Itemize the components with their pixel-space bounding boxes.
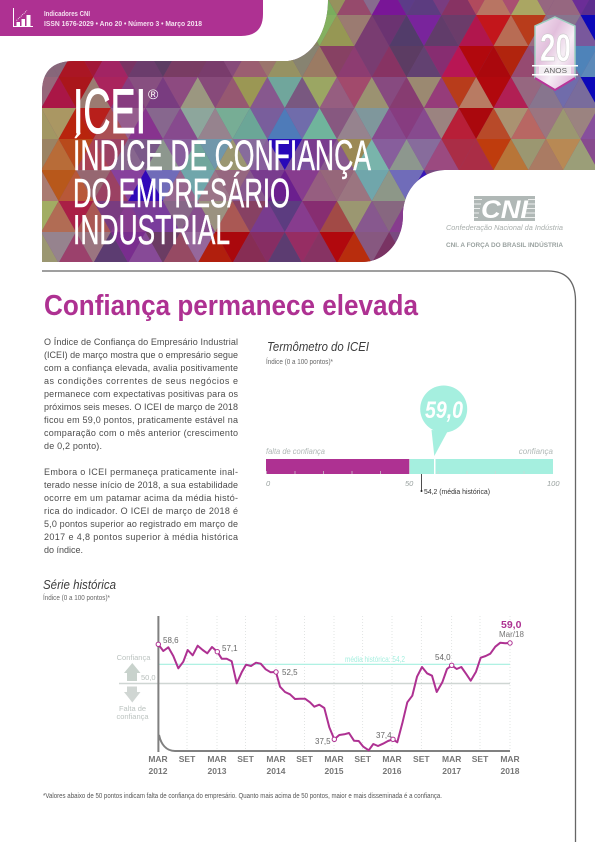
confidence arrows: Confiança: [117, 653, 151, 662]
x axis labels: SET: [237, 754, 255, 764]
header band: Indicadores CNI: [44, 11, 90, 18]
value labels: 37,4: [376, 731, 392, 740]
body text: [44, 337, 238, 555]
thermometer heading: Índice (0 a 100 pontos)*: [266, 357, 333, 366]
x axis labels: [148, 754, 520, 776]
x axis labels: MAR: [324, 754, 344, 764]
body text: (ICEI) de março mostra que o empresário segue: [44, 350, 238, 360]
x axis labels: 2016: [383, 766, 402, 776]
body text: de 0,2 ponto).: [44, 441, 102, 451]
body text: do índice.: [44, 545, 83, 555]
body text: terado nesse início de 2018, a sua estabilidade: [44, 480, 238, 490]
badge: 20 anos: ANOS: [544, 68, 567, 75]
x axis labels: MAR: [148, 754, 168, 764]
body text: O Índice de Confiança do Empresário Industrial: [44, 337, 238, 347]
series markers: [156, 641, 512, 742]
header band: [0, 0, 263, 36]
hero title: ICEI: [73, 77, 146, 147]
confidence arrows: [116, 653, 151, 721]
value labels: 59,0: [501, 619, 522, 631]
hero title: ÍNDICE DE CONFIANÇA: [73, 132, 371, 180]
x axis labels: SET: [354, 754, 372, 764]
hero title: INDUSTRIAL: [73, 206, 230, 253]
value labels: 50,0: [141, 673, 156, 682]
value labels: média histórica: 54,2: [345, 655, 405, 664]
thermometer chart: 0: [266, 479, 271, 488]
x axis labels: SET: [296, 754, 314, 764]
value labels: 58,6: [163, 636, 179, 645]
value labels: Mar/18: [499, 630, 524, 639]
value pin 59,0: [420, 386, 467, 456]
x axis labels: 2013: [208, 766, 227, 776]
header band: ISSN 1676-2029 • Ano 20 • Número 3 • Março 2018: [44, 21, 202, 28]
value labels: 54,0: [435, 653, 451, 662]
x axis labels: MAR: [266, 754, 286, 764]
x axis labels: SET: [472, 754, 489, 764]
historical mean marker: 54,2 (média histórica): [424, 487, 490, 496]
hero title: ®: [148, 86, 159, 102]
CNI logo: Confederação Nacional da Indústria: [446, 225, 563, 232]
thermometer chart: confiança: [519, 447, 554, 456]
x axis labels: SET: [179, 754, 196, 764]
footnote: *Valores abaixo de 50 pontos indicam falta de confiança do empresário. Quanto mais acima de 50 pontos, maior e mais disseminada é a confiança.: [43, 793, 442, 800]
CNI logo: CNI: [481, 196, 529, 224]
confidence arrows: Falta de: [119, 704, 146, 713]
x axis labels: 2012: [149, 766, 168, 776]
body text: próximos seis meses. O ICEI de março de 2018: [44, 402, 238, 412]
historical mean marker: [420, 474, 490, 496]
x axis labels: MAR: [442, 754, 461, 764]
x axis labels: 2017: [442, 766, 461, 776]
thermometer chart: falta de confiança: [266, 447, 326, 456]
icon: bar chart: [13, 8, 33, 27]
historical series heading: Índice (0 a 100 pontos)*: [43, 593, 110, 602]
CNI logo: CNI. A FORÇA DO BRASIL INDÚSTRIA: [446, 242, 564, 249]
x axis labels: 2015: [325, 766, 344, 776]
body text: permanece com expectativas positivas para os: [44, 389, 238, 399]
thermometer chart: [266, 386, 560, 496]
thermometer chart: 50: [405, 479, 414, 488]
line chart: historical series: [116, 616, 524, 776]
body text: rica do indicador. O ICEI de março de 2018 é: [44, 506, 238, 516]
CNI logo: [446, 196, 564, 249]
body text: comparação com o mês anterior (crescimento: [44, 428, 238, 438]
body text: ocorre em um patamar acima da média histó-: [44, 493, 238, 503]
body text: com a confiança elevada, avalia positivamente: [44, 363, 238, 373]
hero triangle mosaic: [24, 0, 595, 263]
x axis labels: 2014: [267, 766, 286, 776]
thermometer chart: 100: [547, 479, 560, 488]
value labels: [141, 619, 524, 746]
thermometer heading: [266, 339, 369, 366]
body text: 5,0 pontos superior ao registrado em março de: [44, 519, 238, 529]
x axis labels: MAR: [500, 754, 520, 764]
value labels: 52,5: [282, 668, 298, 677]
body text: Embora o ICEI permaneça praticamente inal-: [44, 467, 238, 477]
x axis labels: SET: [413, 754, 430, 764]
value labels: 37,5: [315, 737, 331, 746]
value pin 59,0: 59,0: [425, 397, 464, 424]
page panel outline: [42, 271, 576, 842]
historical series heading: Série histórica: [43, 577, 116, 592]
x axis labels: MAR: [207, 754, 227, 764]
confidence arrows: confiança: [116, 712, 149, 721]
hero title: [73, 77, 371, 253]
body text: 2017 e 4,8 pontos superior à média histórica: [44, 532, 238, 542]
thermometer heading: Termômetro do ICEI: [267, 339, 369, 354]
value labels: 57,1: [222, 644, 238, 653]
axes: [158, 616, 510, 752]
body text: ficou em 59,0 pontos, praticamente estável na: [44, 415, 238, 425]
hero title: DO EMPRESÁRIO: [73, 170, 290, 216]
body text: as condições correntes de seus negócios e: [44, 376, 238, 386]
series line: [158, 643, 510, 750]
x axis labels: MAR: [382, 754, 402, 764]
badge: 20 anos: [532, 17, 578, 90]
badge: 20 anos: 20: [540, 27, 571, 70]
x axis labels: 2018: [501, 766, 520, 776]
historical series heading: [43, 577, 116, 602]
main heading: Confiança permanece elevada: [44, 290, 419, 322]
